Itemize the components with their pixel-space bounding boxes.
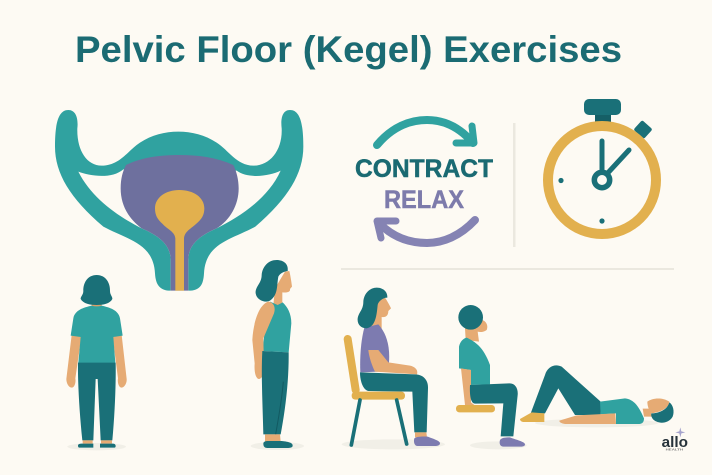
figure: side view	[251, 260, 304, 450]
contract arrow	[377, 120, 474, 145]
relax label: RELAX	[384, 186, 464, 214]
seated figures	[342, 288, 527, 449]
pelvic floor muscle	[55, 110, 303, 291]
brand logo: allo	[662, 435, 688, 451]
stopwatch icon	[548, 99, 656, 234]
figure: bridge transition	[456, 305, 527, 449]
pelvic anatomy illustration	[55, 110, 303, 291]
figure: seated on chair	[342, 288, 445, 449]
title: Pelvic Floor (Kegel) Exercises	[75, 29, 622, 70]
relax arrow	[377, 220, 475, 243]
stopwatch crown	[584, 99, 621, 115]
figure: lying bridge	[520, 365, 674, 424]
stopwatch side button	[633, 120, 653, 139]
stopwatch ticks	[558, 178, 564, 183]
stopwatch hands	[602, 141, 629, 176]
brand logo	[662, 427, 688, 452]
lying figure	[520, 365, 688, 452]
brand logo: HEALTH	[666, 448, 683, 452]
chair	[348, 339, 407, 445]
standing figures	[66, 260, 304, 450]
figure: back view	[66, 275, 127, 450]
bladder	[121, 155, 239, 291]
urethra and yellow bulb	[155, 190, 204, 291]
contract and relax cycle	[355, 120, 493, 243]
contract label: CONTRACT	[355, 155, 493, 183]
stopwatch ring	[548, 126, 656, 234]
